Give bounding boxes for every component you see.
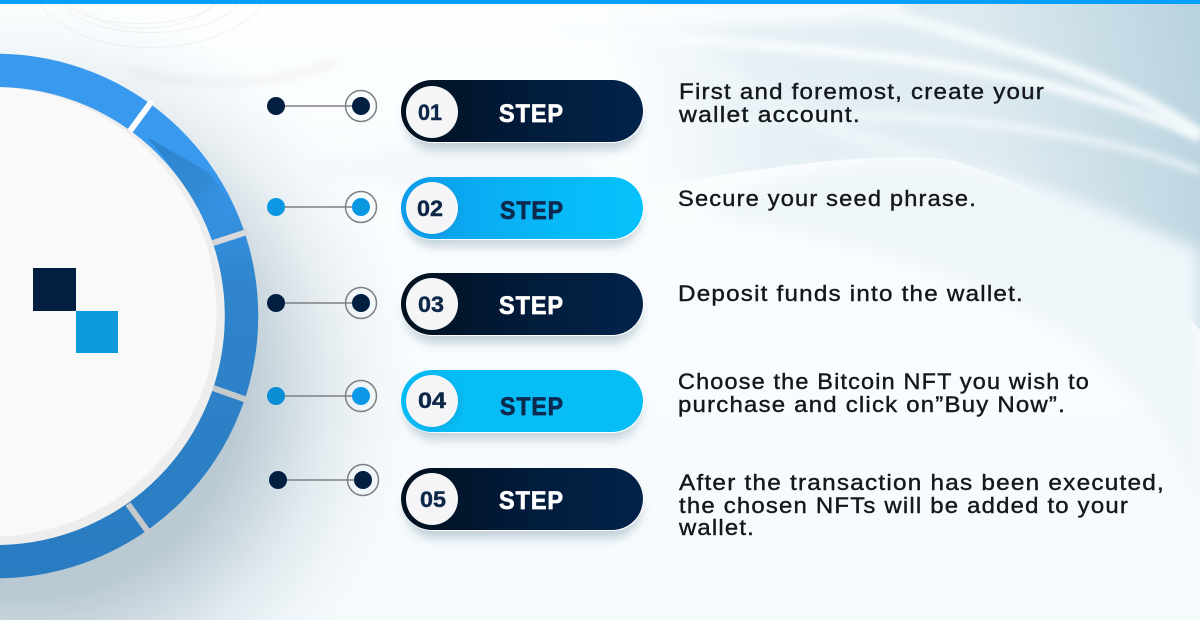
step pill 03: STEP: [499, 292, 564, 320]
step pill 04: 04: [418, 388, 447, 413]
text: step 1 description: wallet account.: [678, 102, 861, 127]
text: step 5 description: [678, 470, 1165, 540]
segment shading: [147, 137, 244, 240]
step pill 05: STEP: [499, 487, 564, 515]
step pill 05: [401, 468, 644, 538]
step pill 02: 02: [417, 196, 443, 221]
text: step 4 description: purchase and click on”Buy Now”.: [678, 392, 1066, 417]
text: step 2 description: Secure your seed phrase.: [678, 186, 977, 211]
connector 3: [267, 288, 376, 318]
text: step 4 description: [678, 369, 1090, 417]
connector 5: [269, 464, 378, 496]
panel: central disc: [0, 87, 225, 545]
step pill 02: [401, 177, 644, 247]
text: step 1 description: [678, 79, 1045, 127]
step pill 03: 03: [418, 292, 444, 317]
text: step 3 description: Deposit funds into the wallet.: [678, 281, 1024, 306]
step pill 03: [401, 273, 644, 343]
connector 4: [267, 380, 376, 412]
icon: logo squares: [33, 268, 118, 353]
ring gaps: [128, 101, 247, 533]
step pill 01: STEP: [499, 100, 564, 128]
step pill 01: 01: [418, 100, 442, 125]
connector 1: [267, 90, 376, 122]
step pill 01: [401, 80, 644, 150]
text: step 5 description: After the transaction has been executed,: [679, 470, 1165, 495]
top accent bar: [0, 0, 1200, 4]
text: step 5 description: wallet.: [678, 515, 755, 540]
circle shadow: [0, 4, 450, 620]
step pill 02: STEP: [500, 197, 564, 225]
text: step 5 description: the chosen NFTs will be added to your: [679, 493, 1129, 518]
step pill 04: STEP: [500, 393, 564, 421]
text: step 1 description: First and foremost, create your: [679, 79, 1045, 104]
connector 2: [267, 192, 376, 222]
panel: segmented blue ring: [0, 70, 247, 562]
step pill 04: [401, 370, 644, 440]
step pill 05: 05: [420, 487, 446, 512]
text: step 4 description: Choose the Bitcoin NFT you wish to: [678, 369, 1090, 394]
